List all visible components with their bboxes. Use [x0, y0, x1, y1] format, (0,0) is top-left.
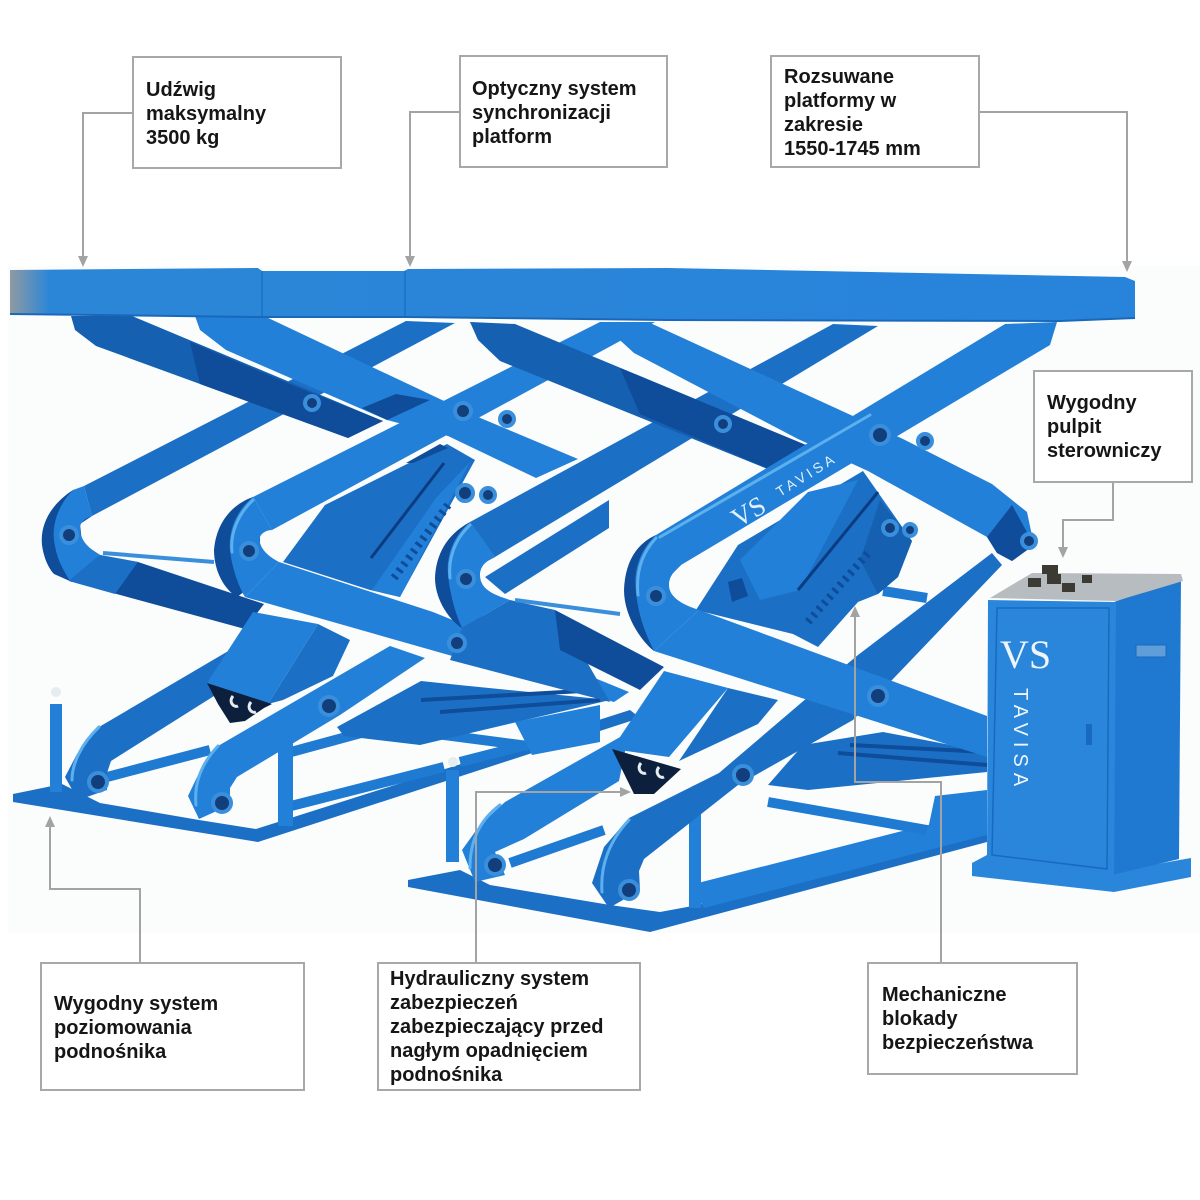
callout: levelling: podnośnika [54, 1041, 167, 1063]
callout: levelling: poziomowania [54, 1017, 193, 1039]
brand mark on arm [726, 450, 840, 533]
callout: control panel: sterowniczy [1047, 440, 1162, 462]
rear crossing arm: right lift [435, 324, 878, 702]
side handle [1136, 645, 1166, 657]
safety ladder and cylinder: left lift [283, 444, 475, 597]
inner lower arm: left lift [188, 646, 425, 819]
cabinet brand: TAVISA [1009, 688, 1031, 792]
connector: hydraulic safety [476, 787, 631, 963]
control cabinet [972, 565, 1191, 892]
callout: control panel: Wygodny [1047, 392, 1138, 414]
callout: mechanical locks: blokady [882, 1008, 958, 1030]
callout: mechanical locks [868, 963, 1077, 1074]
callout: optical synchronisation: platform [472, 126, 552, 148]
safety ladder and cylinder: right lift [696, 471, 912, 647]
callout: control panel: pulpit [1047, 416, 1102, 438]
connector: optical synchronisation [405, 112, 460, 267]
brand mark on arm: VS [726, 490, 771, 533]
callout: optical synchronisation: Optyczny system [472, 78, 637, 100]
callout: levelling: Wygodny system [54, 993, 218, 1015]
callout: platform width: zakresie [784, 114, 863, 136]
callout: platform width: Rozsuwane [784, 66, 894, 88]
callout: levelling [41, 963, 304, 1090]
connector: platform width [979, 112, 1132, 272]
callout: platform width: platformy w [784, 90, 897, 112]
door lock [1086, 724, 1092, 745]
cabinet side [1112, 578, 1181, 875]
callout: hydraulic safety: nagłym opadnięciem [390, 1040, 588, 1062]
connector: levelling [45, 816, 140, 963]
lower right arm: left lift [485, 500, 609, 594]
base frame: right lift [408, 591, 987, 932]
callout: control panel [1034, 371, 1192, 482]
hydraulic cylinder: right lift [612, 671, 778, 794]
connector: control panel [1058, 482, 1113, 558]
cabinet base [972, 855, 1191, 892]
connector: mechanical locks [850, 606, 941, 963]
connector: capacity [78, 113, 133, 267]
front arms: right lift [624, 322, 1057, 757]
upper arms: right lift [470, 322, 1034, 561]
upper arms: left lift [71, 316, 578, 478]
front arms: left lift [214, 322, 655, 702]
callout: capacity: 3500 kg [146, 127, 219, 149]
outer lower arm: right lift [462, 732, 629, 882]
scissor lift illustration [10, 268, 1135, 932]
rear crossing arm: left lift [42, 321, 455, 629]
base frame: left lift [13, 681, 640, 862]
callout: hydraulic safety: podnośnika [390, 1064, 503, 1086]
callout: optical synchronisation: synchronizacji [472, 102, 611, 124]
brand mark on arm: TAVISA [773, 450, 840, 500]
lift platforms [10, 268, 1135, 321]
cabinet logo: VS [1000, 632, 1051, 677]
control knobs [1028, 565, 1092, 592]
callout: capacity [133, 57, 341, 168]
callout: hydraulic safety: zabezpieczeń [390, 992, 518, 1014]
outer lower arm: left lift [65, 650, 230, 800]
hydraulic cylinder: left lift [207, 612, 350, 723]
callout: mechanical locks: Mechaniczne [882, 984, 1006, 1006]
callout: platform width [771, 56, 979, 167]
cabinet top [990, 573, 1183, 601]
pivot bolts [61, 396, 1036, 899]
callout: mechanical locks: bezpieczeństwa [882, 1032, 1034, 1054]
callout: capacity: Udźwig [146, 79, 216, 101]
callout: capacity: maksymalny [146, 103, 267, 125]
callout: hydraulic safety: zabezpieczający przed [390, 1016, 603, 1038]
callout: hydraulic safety [378, 963, 640, 1090]
inner lower arm: right lift [592, 553, 1002, 908]
callout: platform width: 1550-1745 mm [784, 138, 921, 160]
callout: hydraulic safety: Hydrauliczny system [390, 968, 589, 990]
cabinet front [987, 600, 1116, 877]
callout: optical synchronisation [460, 56, 667, 167]
